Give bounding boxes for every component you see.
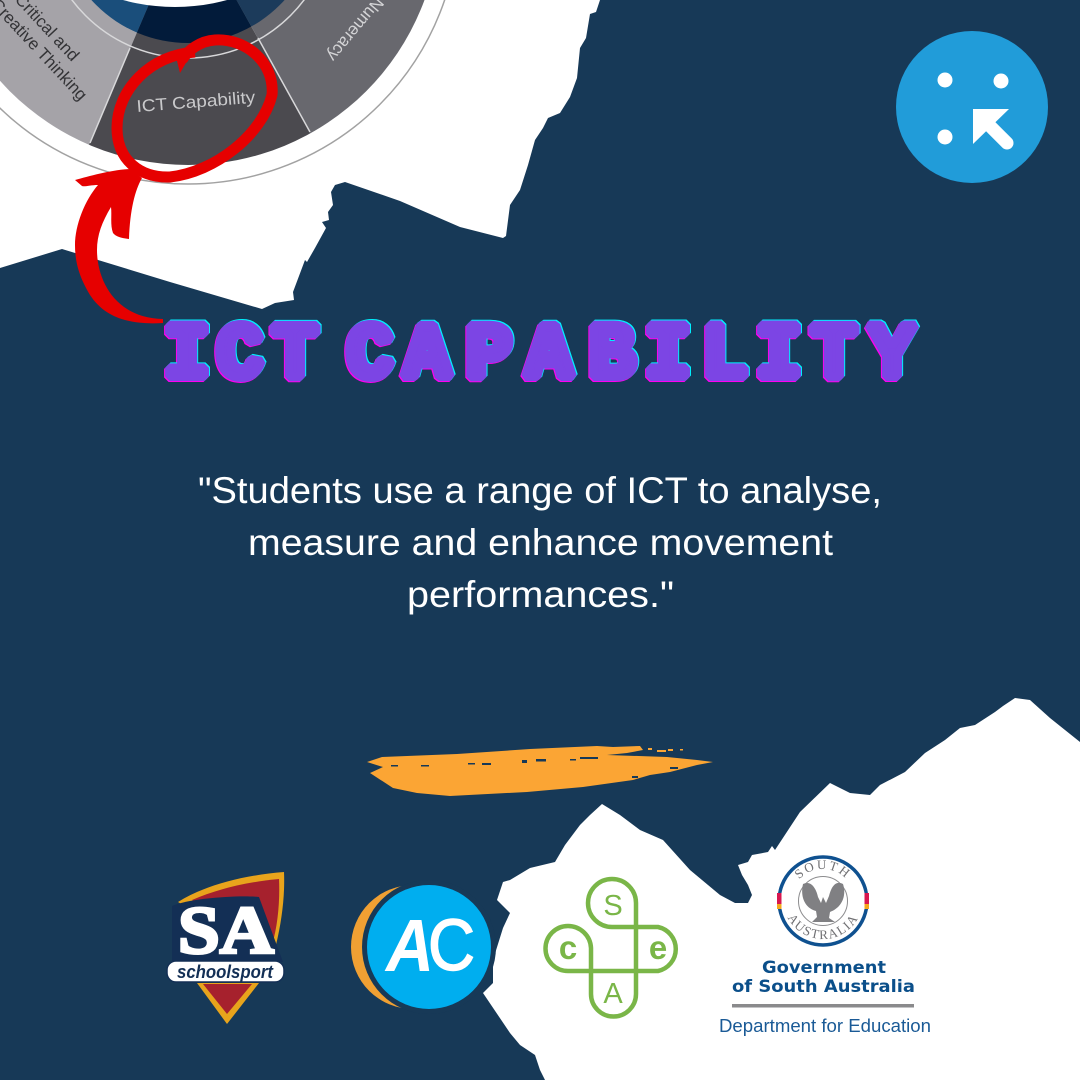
logo: SA schoolsport: schoolsport [177,962,274,982]
logo: CSE clover: c [559,929,577,966]
title: ICT Capability: ICT CAPABILITY [163,314,915,402]
state emblem [777,855,869,947]
wheel label: ICT capability: ICT Capability [136,88,256,116]
title: ICT Capability: ICT CAPABILITY [164,312,916,400]
torn white paper: bottom right [483,698,1080,1080]
torn white paper: top left [0,0,600,309]
quote text [198,470,882,615]
logo: CSE clover: S [603,890,623,922]
logo: SA schoolsport: SA [178,892,274,968]
logo: SA schoolsport [167,872,284,1024]
icon: cursor badge [896,31,1048,183]
general capabilities wheel [0,0,446,185]
logo: Government of South Australia [719,855,931,1036]
department name: Department for Education [719,1016,931,1036]
title: ICT Capability: ICT CAPABILITY [165,312,917,400]
government wordmark: Government [762,958,886,978]
red curved arrow [75,169,163,323]
quote text: "Students use a range of ICT to analyse, [198,470,882,511]
logo: AC: C [428,906,475,986]
government wordmark [732,958,915,997]
orange brush stroke [367,746,713,796]
government wordmark: of South Australia [732,977,915,997]
state emblem: SOUTH [795,860,850,878]
state emblem: AUSTRALIA [787,916,858,940]
quote text: performances." [407,574,674,615]
logo: AC: A [384,904,434,987]
red hand-drawn circle [117,40,272,177]
logo: CSE clover [546,879,676,1017]
logo: CSE clover: A [603,978,623,1010]
quote text: measure and enhance movement [248,522,834,563]
logo: AC [351,880,496,1014]
logo: CSE clover: e [649,929,667,966]
